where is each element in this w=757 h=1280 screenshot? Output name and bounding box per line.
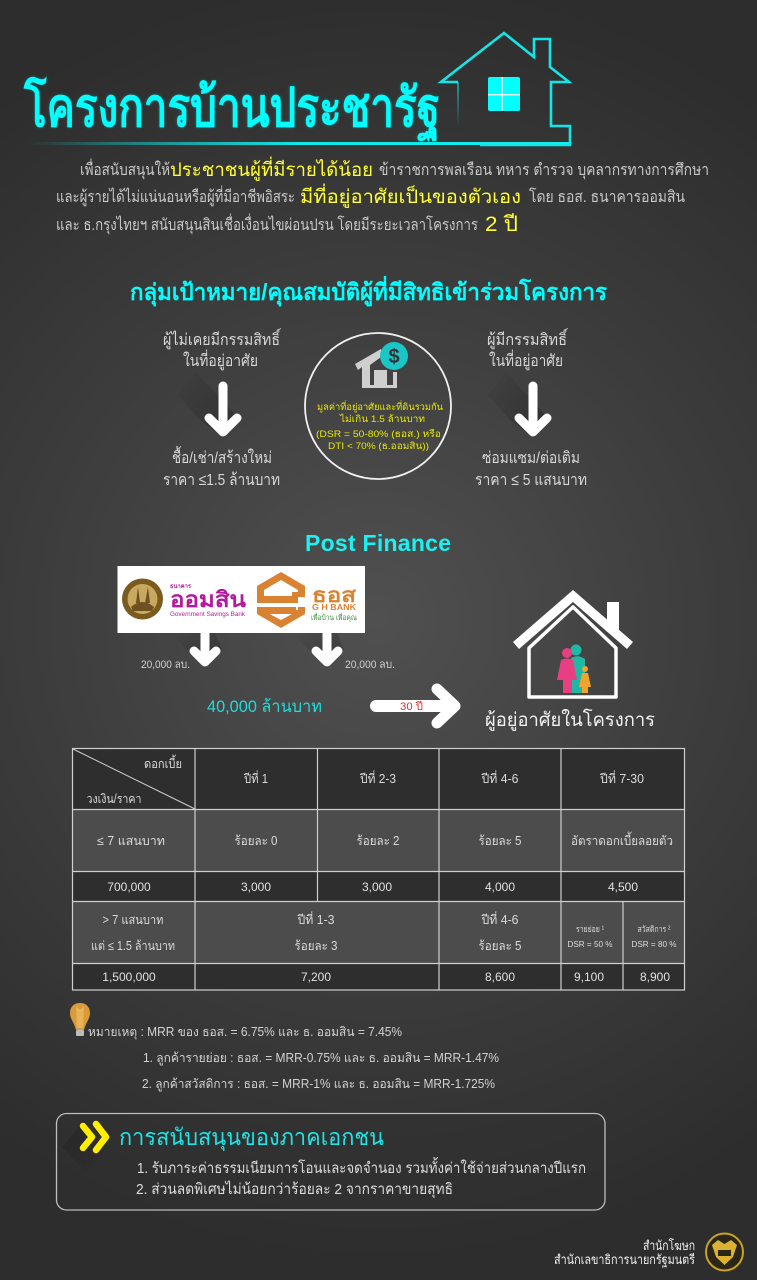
table row: up to 700k rates (97, 831, 673, 848)
icon: savings bank seal (122, 578, 163, 620)
intro paragraph: โดย ธอส. ธนาคารออมสิน (529, 187, 685, 206)
table row: 1,500,000 payments (102, 970, 670, 984)
table row: 1,500,000 payments: 8,900 (640, 970, 670, 984)
orange child (579, 666, 591, 693)
notes: หมายเหตุ : MRR ของ ธอส. = 6.75% และ ธ. ออมสิน = 7.45% (88, 1025, 402, 1040)
footer credit: สำนักโฆษก (643, 1238, 695, 1253)
circle text: DTI < 70% (ธ.ออมสิน)) (328, 441, 429, 452)
title: โครงการบ้านประชารัฐ (23, 76, 440, 143)
icon: house with family (513, 590, 633, 697)
table row: over 700k rates: ร้อยละ 5 (478, 939, 522, 953)
GH bank wordmark: G H BANK (312, 603, 356, 612)
notes (88, 1025, 499, 1092)
arrows from banks: 20,000 ลบ. (141, 659, 190, 671)
intro paragraph: และผู้รายได้ไม่แน่นอนหรือผู้ที่มีอาชีพอิสระ (56, 185, 295, 207)
arrows from banks (141, 633, 395, 671)
intro paragraph: มีที่อยู่อาศัยเป็นของตัวเอง (300, 183, 521, 208)
icon: house with coin: $ (388, 346, 400, 368)
table row: over 700k rates: ปีที่ 4-6 (481, 911, 519, 927)
caption: residents: ผู้อยู่อาศัยในโครงการ (485, 708, 655, 731)
teal parent (570, 644, 585, 693)
panel: left eligibility column: ราคา ≤1.5 ล้านบาท (163, 471, 280, 489)
intro paragraph (56, 156, 709, 236)
icon: light bulb (70, 1003, 90, 1036)
table header: วงเงิน/ราคา (86, 792, 142, 806)
panel heading: การสนับสนุนของภาคเอกชน (119, 1124, 384, 1151)
notes: 1. ลูกค้ารายย่อย : ธอส. = MRR-0.75% และ ธ. ออมสิน = MRR-1.47% (143, 1051, 499, 1066)
table row: over 700k rates: ร้อยละ 3 (294, 939, 338, 953)
intro paragraph: ประชาชนผู้ที่มีรายได้น้อย (170, 156, 373, 181)
arrows from banks: 20,000 ลบ. (345, 659, 395, 671)
icon: GH bank logo (257, 572, 305, 628)
intro paragraph: ข้าราชการพลเรือน ทหาร ตำรวจ บุคลากรทางการศึกษา (379, 161, 709, 180)
icon: house with coin (355, 342, 408, 388)
panel: right eligibility column (475, 328, 587, 489)
savings bank wordmark: ออมสิน (170, 587, 246, 612)
table row: over 700k rates (91, 911, 676, 953)
table header: ปีที่ 2-3 (360, 770, 396, 786)
table row: 700,000 payments: 700,000 (107, 880, 151, 894)
circle text: (DSR = 50-80% (ธอส.) หรือ (316, 429, 441, 440)
savings bank wordmark: Government Savings Bank (170, 611, 246, 618)
panel list (136, 1157, 586, 1199)
table row: up to 700k rates: ≤ 7 แสนบาท (97, 834, 165, 848)
panel: right eligibility column: ผู้มีกรรมสิทธิ์ (487, 328, 569, 350)
table row: up to 700k rates: ร้อยละ 2 (356, 834, 400, 848)
table row: over 700k rates: สวัสดิการ ² (638, 924, 671, 934)
table row: 1,500,000 payments: 9,100 (574, 970, 604, 984)
table header: ปีที่ 4-6 (481, 770, 519, 786)
icon: house outline (27, 33, 570, 145)
pink parent (557, 648, 577, 693)
panel: private sector support (56, 1114, 605, 1210)
panel: price condition circle (305, 333, 451, 479)
table row: 700,000 payments: 4,000 (485, 880, 515, 894)
arrow: 30 years (370, 689, 455, 723)
table row: over 700k rates: DSR = 80 % (632, 940, 676, 949)
table header: ปีที่ 1 (244, 770, 268, 786)
intro paragraph: 2 ปี (485, 213, 518, 236)
GH bank wordmark: ธอส (312, 585, 357, 607)
table row: 1,500,000 payments: 8,600 (485, 970, 515, 984)
circle text: ไม่เกิน 1.5 ล้านบาท (339, 413, 425, 425)
heading: Post Finance: Post Finance (305, 530, 451, 556)
table header (86, 754, 644, 806)
panel: right eligibility column: ซ่อมแซม/ต่อเติม (482, 450, 580, 467)
heading: target group: กลุ่มเป้าหมาย/คุณสมบัติผู้ที่มีสิทธิเข้าร่วมโครงการ (130, 275, 608, 307)
GH bank wordmark (311, 585, 357, 622)
table header: ดอกเบี้ย (144, 754, 182, 771)
table row: 1,500,000 payments: 7,200 (301, 970, 331, 984)
panel list: 2. ส่วนลดพิเศษไม่น้อยกว่าร้อยละ 2 จากราคาขายสุทธิ (136, 1180, 453, 1199)
table row: 700,000 payments: 4,500 (608, 880, 638, 894)
arrow: 30 years: 30 ปี (400, 700, 423, 713)
table row: 1,500,000 payments: 1,500,000 (102, 970, 156, 984)
footer credit (554, 1238, 695, 1268)
table: interest rates (72, 748, 684, 990)
total amount: 40,000 ล้านบาท (207, 697, 322, 716)
savings bank wordmark: ธนาคาร (170, 583, 192, 590)
title: โครงการบ้านประชารัฐ (23, 76, 440, 143)
panel: right eligibility column: ในที่อยู่อาศัย (489, 349, 563, 371)
savings bank wordmark (170, 583, 246, 618)
circle text: มูลค่าที่อยู่อาศัยและที่ดินรวมกัน (317, 400, 443, 413)
table row: over 700k rates: แต่ ≤ 1.5 ล้านบาท (91, 939, 175, 953)
panel: left eligibility column: ผู้ไม่เคยมีกรรมสิทธิ์ (163, 328, 282, 350)
intro paragraph: และ ธ.กรุงไทยฯ สนับสนุนสินเชื่อเงื่อนไขผ่อนปรน โดยมีระยะเวลาโครงการ (56, 213, 478, 235)
table row: 700,000 payments: 3,000 (362, 880, 392, 894)
circle text (316, 400, 443, 452)
icon: cabinet seal (706, 1234, 743, 1270)
panel: right eligibility column: ราคา ≤ 5 แสนบาท (475, 472, 587, 489)
panel: bank logos (118, 566, 365, 633)
table row: 700,000 payments: 3,000 (241, 880, 271, 894)
panel list: 1. รับภาระค่าธรรมเนียมการโอนและจดจำนอง รวมทั้งค่าใช้จ่ายส่วนกลางปีแรก (137, 1157, 586, 1177)
panel: left eligibility column: ในที่อยู่อาศัย (183, 349, 258, 371)
table row: over 700k rates: > 7 แสนบาท (102, 913, 164, 927)
intro paragraph: เพื่อสนับสนุนให้ (80, 158, 170, 180)
panel: left eligibility column (163, 328, 282, 489)
GH bank wordmark: เพื่อบ้าน เพื่อคุณ (311, 612, 357, 622)
table row: up to 700k rates: ร้อยละ 0 (234, 834, 278, 848)
notes: 2. ลูกค้าสวัสดิการ : ธอส. = MRR-1% และ ธ. ออมสิน = MRR-1.725% (142, 1077, 495, 1092)
footer credit: สำนักเลขาธิการนายกรัฐมนตรี (554, 1252, 695, 1268)
table row: up to 700k rates: ร้อยละ 5 (478, 834, 522, 848)
table header: ปีที่ 7-30 (600, 770, 644, 786)
table row: over 700k rates: รายย่อย ¹ (576, 924, 604, 934)
icon: double chevron (62, 1124, 108, 1172)
table row: over 700k rates: ปีที่ 1-3 (297, 911, 335, 927)
table row: up to 700k rates: อัตราดอกเบี้ยลอยตัว (571, 831, 673, 848)
table row: 700,000 payments (107, 880, 638, 894)
panel: left eligibility column: ชื้อ/เช่า/สร้างใหม่ (172, 446, 272, 467)
table row: over 700k rates: DSR = 50 % (568, 940, 612, 949)
